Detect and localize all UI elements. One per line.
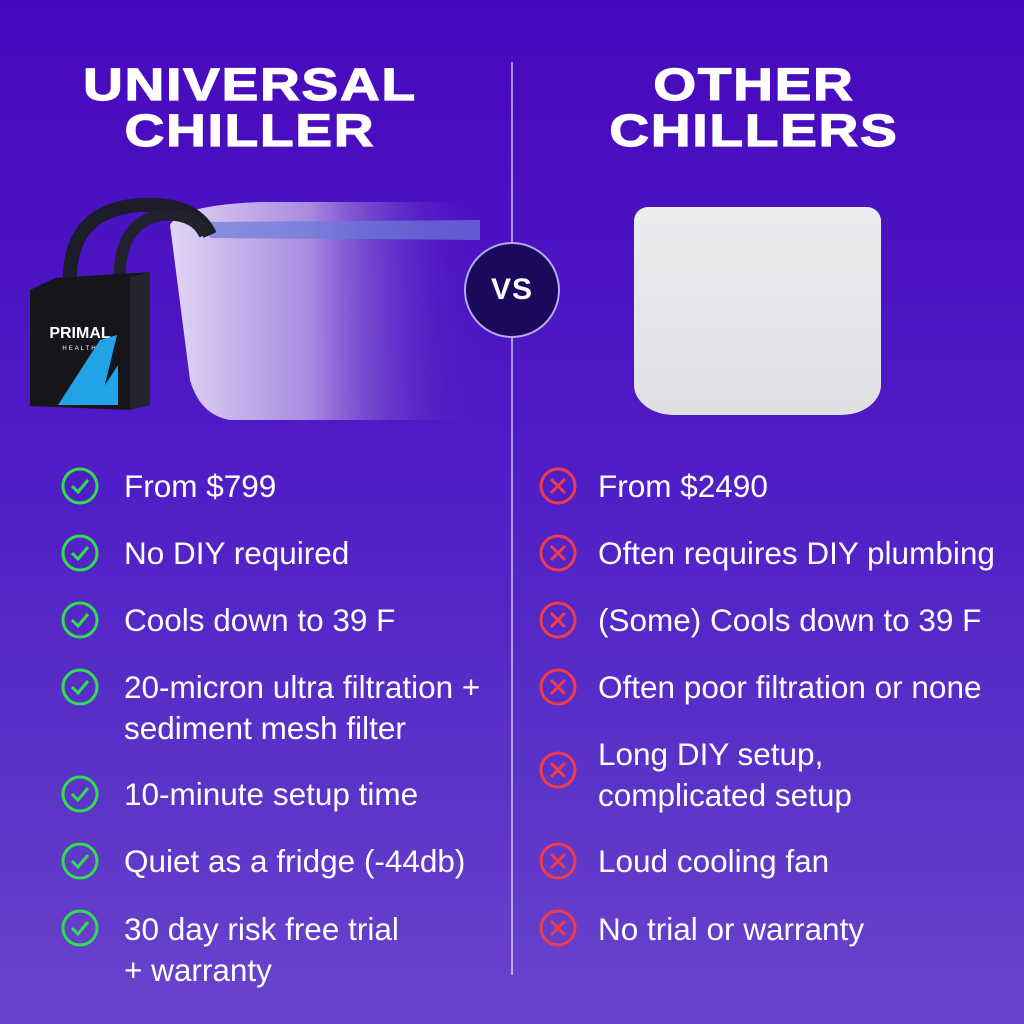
list: universal chiller features: 10-minute setup time bbox=[124, 776, 418, 812]
heading: universal chiller: UNIVERSAL bbox=[83, 59, 417, 110]
list: universal chiller features: + warranty bbox=[124, 952, 272, 988]
list: universal chiller features: From $799 bbox=[124, 468, 276, 504]
item 3 bbox=[62, 602, 395, 638]
image: universal chiller with tub bbox=[30, 198, 480, 420]
list: other chillers drawbacks: complicated setup bbox=[598, 777, 852, 813]
heading: other chillers bbox=[609, 59, 899, 156]
item 5 bbox=[540, 736, 852, 813]
image: other chiller white box bbox=[634, 207, 881, 415]
vs badge: VS bbox=[491, 273, 533, 306]
item 4 bbox=[62, 668, 480, 746]
item 6 bbox=[62, 842, 465, 880]
list: universal chiller features: No DIY required bbox=[124, 535, 349, 571]
image: universal chiller with tub: HEALTH bbox=[62, 346, 98, 352]
heading: universal chiller: CHILLER bbox=[125, 105, 375, 156]
list: universal chiller features: 30 day risk free trial bbox=[124, 911, 399, 947]
item 2 bbox=[62, 534, 349, 572]
item 1 bbox=[540, 468, 768, 504]
divider line bbox=[511, 62, 513, 975]
list: universal chiller features bbox=[62, 468, 480, 988]
heading: other chillers: OTHER bbox=[653, 59, 855, 110]
list: other chillers drawbacks: (Some) Cools down to 39 F bbox=[598, 602, 981, 638]
vs badge bbox=[464, 242, 560, 338]
list: universal chiller features: 20-micron ultra filtration + bbox=[124, 669, 480, 705]
list: other chillers drawbacks: Loud cooling fan bbox=[598, 843, 829, 879]
item 4 bbox=[540, 668, 981, 706]
list: other chillers drawbacks: Often requires DIY plumbing bbox=[598, 535, 995, 571]
image: universal chiller with tub: PRIMAL bbox=[49, 325, 111, 342]
heading: universal chiller bbox=[83, 59, 417, 156]
list: universal chiller features: sediment mesh filter bbox=[124, 710, 406, 746]
item 7 bbox=[540, 910, 864, 947]
list: universal chiller features: Quiet as a fridge (-44db) bbox=[124, 843, 465, 879]
list: other chillers drawbacks: Long DIY setup, bbox=[598, 736, 823, 772]
list: other chillers drawbacks bbox=[540, 468, 995, 947]
item 7 bbox=[62, 910, 399, 988]
item 3 bbox=[540, 602, 981, 638]
item 6 bbox=[540, 842, 829, 880]
list: universal chiller features: Cools down to 39 F bbox=[124, 602, 395, 638]
list: other chillers drawbacks: Often poor filtration or none bbox=[598, 669, 981, 705]
item 1 bbox=[62, 468, 276, 504]
item 5 bbox=[62, 776, 418, 812]
list: other chillers drawbacks: No trial or warranty bbox=[598, 911, 864, 947]
item 2 bbox=[540, 534, 995, 572]
heading: other chillers: CHILLERS bbox=[609, 105, 899, 156]
list: other chillers drawbacks: From $2490 bbox=[598, 468, 768, 504]
